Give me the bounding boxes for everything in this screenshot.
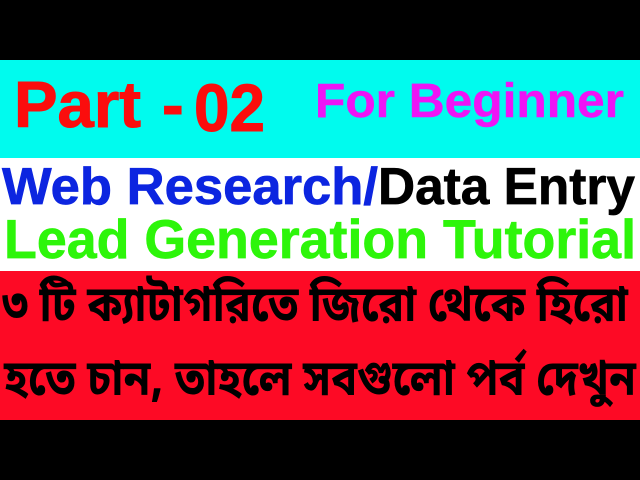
heading: Part -: Part xyxy=(14,68,141,141)
panel: red Bengali message band xyxy=(0,271,640,420)
subheading: For Beginner: For Beginner xyxy=(315,75,624,128)
title: Web Research / Data Entry: Data Entry xyxy=(378,158,635,216)
heading: 02: 02 xyxy=(194,71,265,146)
panel: white title band xyxy=(0,158,640,271)
title: Lead Generation Tutorial: Lead Generation Tutorial xyxy=(4,208,636,270)
title: Web Research / Data Entry xyxy=(2,158,635,216)
heading: Part -: - xyxy=(162,68,184,141)
panel: cyan header band xyxy=(0,60,640,158)
title: Web Research / Data Entry: Web Research/ xyxy=(2,158,378,216)
